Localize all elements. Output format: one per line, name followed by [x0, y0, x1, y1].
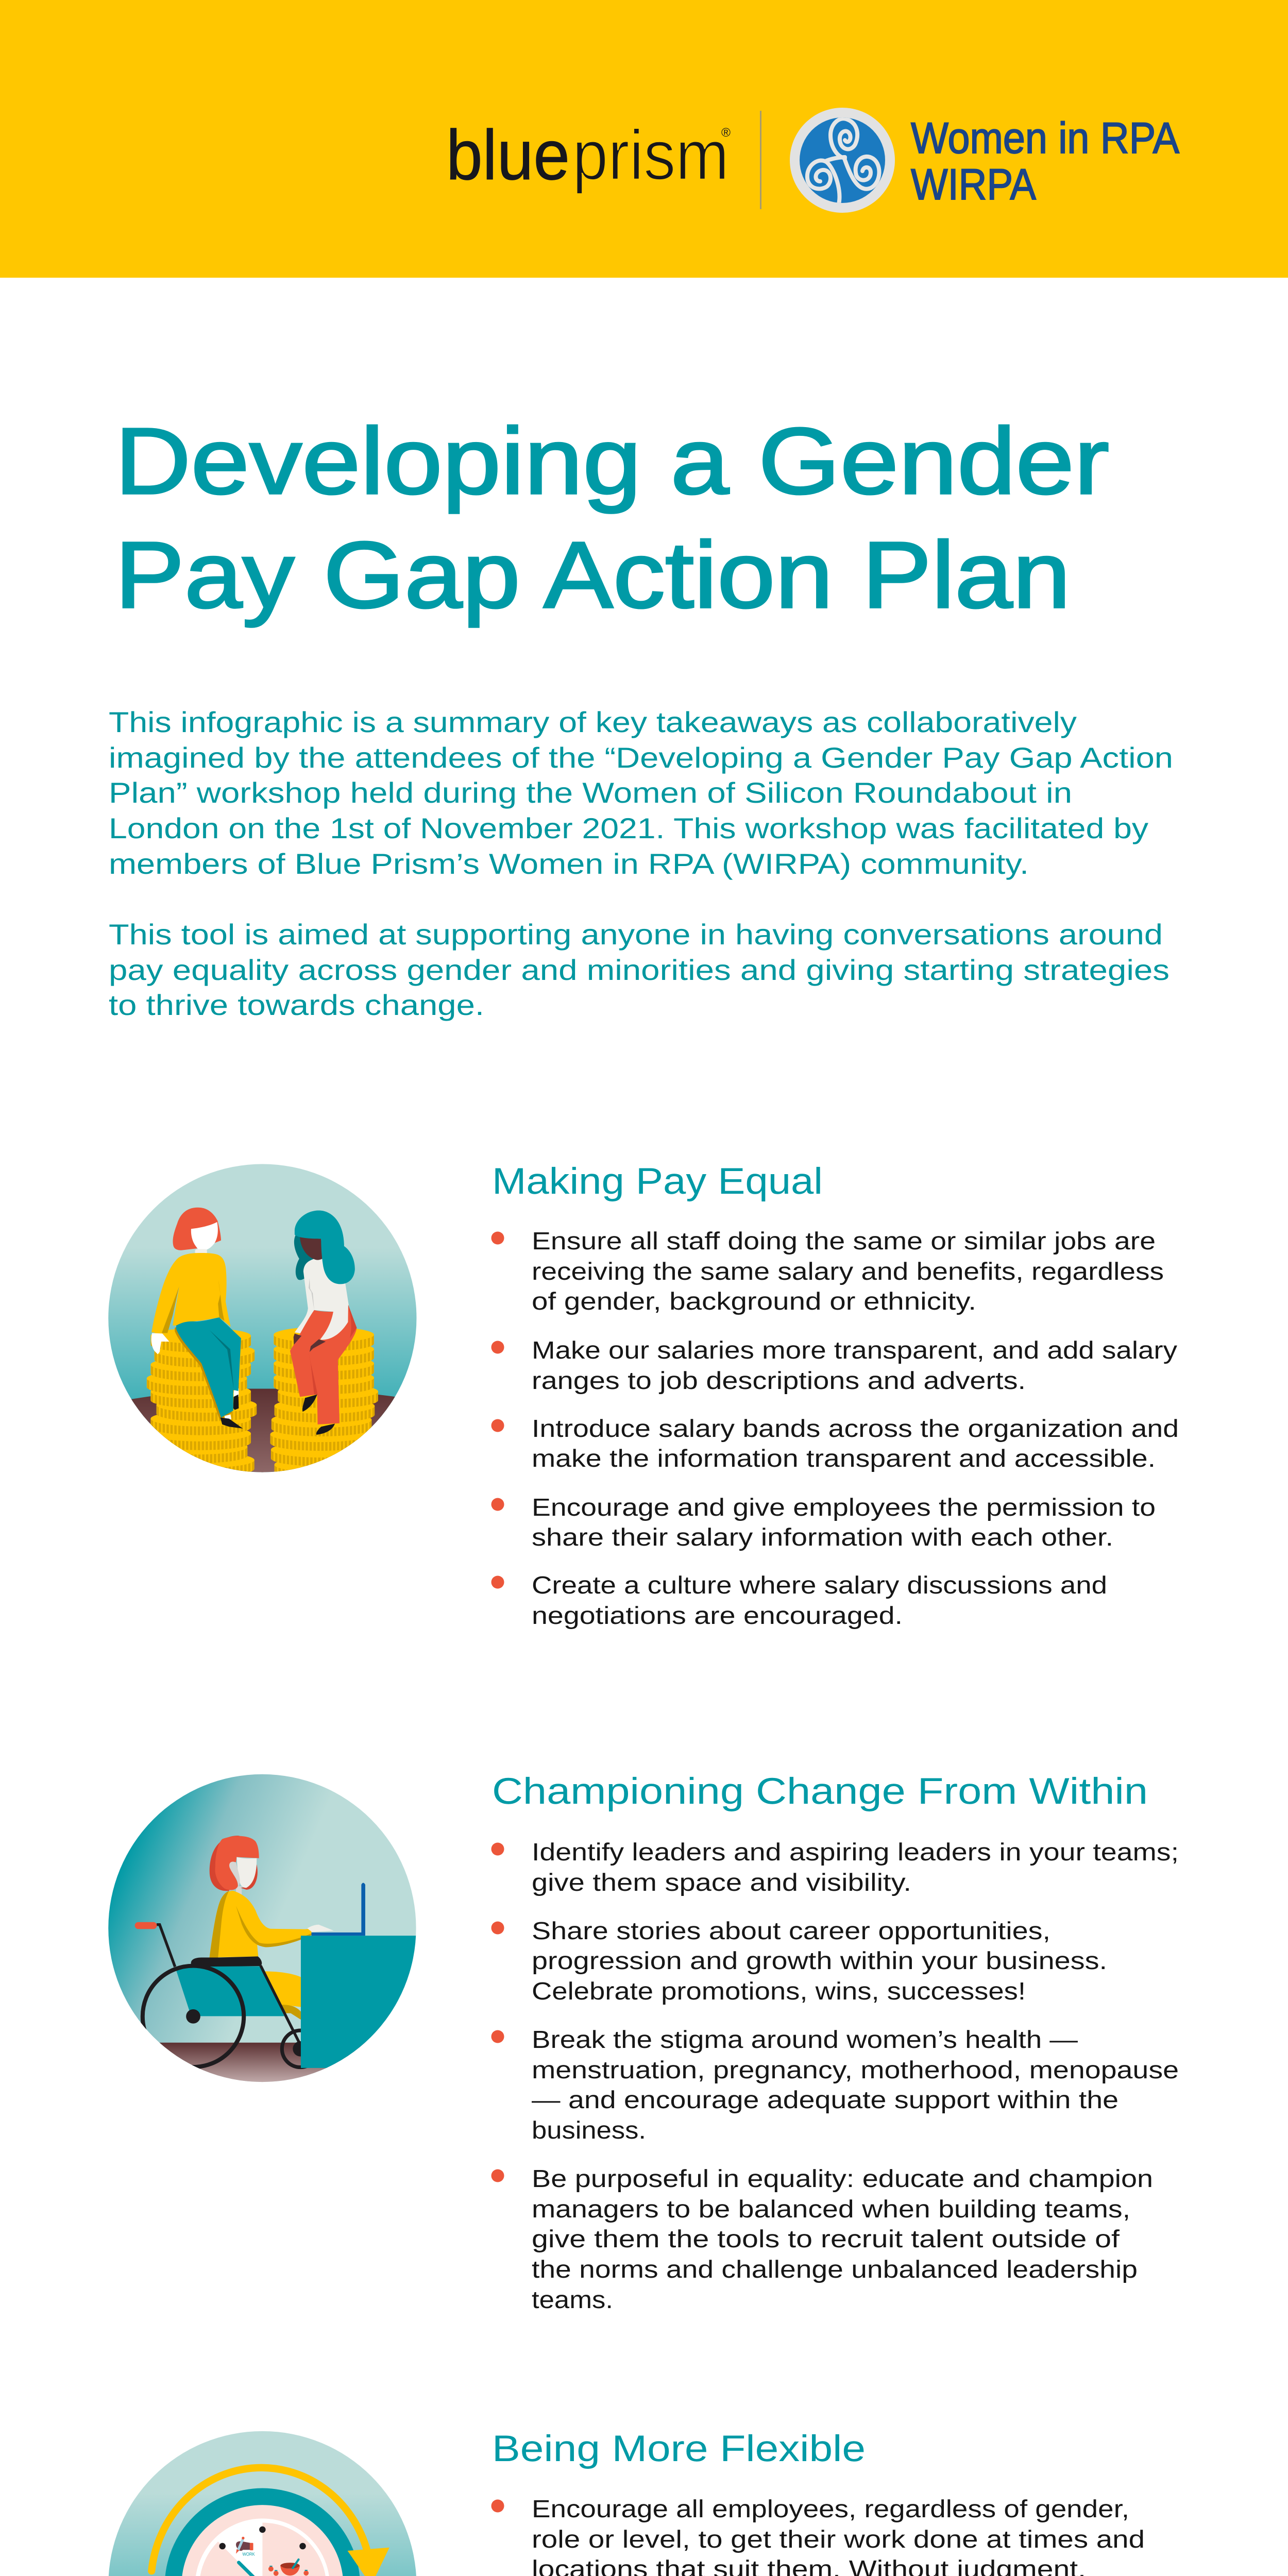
- bullet list: Break the stigma around women’s health —: [532, 2026, 1078, 2054]
- big wheel: [143, 1966, 244, 2067]
- bullet list: teams.: [532, 2286, 613, 2314]
- intro paragraph 1: This infographic is a summary of key takeaways as collaboratively: [109, 706, 1077, 738]
- clock face: [165, 2488, 360, 2576]
- section: Being More Flexible: [492, 2428, 1167, 2576]
- logo text: Women in RPA WIRPA: [911, 114, 1179, 209]
- illustration: woman in wheelchair at a desk with laptop: [100, 1766, 422, 2089]
- right coin stack: [270, 1327, 378, 1481]
- bullet list: — and encourage adequate support within the: [532, 2087, 1118, 2114]
- bullet list: receiving the same salary and benefits, regardless: [532, 1258, 1164, 1285]
- bullet list: progression and growth within your business.: [532, 1947, 1107, 1975]
- intro paragraph 1: Plan” workshop held during the Women of Silicon Roundabout in: [109, 776, 1072, 809]
- logo: blueprism: prism: [572, 116, 729, 195]
- icon: work hand: [236, 2537, 255, 2557]
- heading: Being More Flexible: [492, 2428, 866, 2469]
- arrows: circular cycle: [132, 2468, 389, 2576]
- bullet list: Encourage and give employees the permission to: [532, 1494, 1156, 1521]
- intro paragraph 2: to thrive towards change.: [109, 989, 484, 1021]
- bullet list: give them space and visibility.: [532, 1869, 911, 1896]
- bullet list: [492, 1839, 1179, 2314]
- intro paragraph 1: members of Blue Prism’s Women in RPA (WIRPA) community.: [109, 848, 1029, 880]
- logo: blueprism: blue: [446, 116, 570, 195]
- bullet list: of gender, background or ethnicity.: [532, 1288, 976, 1315]
- bullet list: Be purposeful in equality: educate and champion: [532, 2165, 1153, 2193]
- intro paragraph 1: [109, 706, 1173, 880]
- seated woman: [210, 1836, 334, 1958]
- bullet list: Create a culture where salary discussions and: [532, 1572, 1107, 1599]
- logo: blueprism: ®: [721, 126, 731, 140]
- woman with red hair: [151, 1208, 243, 1429]
- bullet list: [492, 1228, 1179, 1630]
- bullet list: give them the tools to recruit talent outside of: [532, 2226, 1120, 2253]
- section: Making Pay Equal: [492, 1161, 1179, 1630]
- bullet list: Identify leaders and aspiring leaders in your teams;: [532, 1839, 1179, 1866]
- bullet list: role or level, to get their work done at times and: [532, 2526, 1145, 2553]
- bullet list: Ensure all staff doing the same or similar jobs are: [532, 1228, 1156, 1255]
- logo divider: [760, 111, 761, 209]
- illustration: clock with cycle arrows and clouds: [100, 2425, 422, 2576]
- title: [115, 408, 1109, 628]
- bullet list: [492, 2496, 1167, 2576]
- woman with teal hair: [290, 1211, 357, 1435]
- bullet list: business.: [532, 2117, 646, 2144]
- logo: WIRPA triskele badge: [790, 108, 895, 213]
- intro paragraph 2: This tool is aimed at supporting anyone in having conversations around: [109, 918, 1163, 951]
- bullet list: make the information transparent and accessible.: [532, 1445, 1156, 1472]
- bullet list: share their salary information with each other.: [532, 1524, 1113, 1551]
- logo: blueprism: [446, 116, 731, 195]
- icon: bowl and tomatoes: [268, 2560, 309, 2576]
- illustration: two women sitting on coin stacks: [100, 1157, 422, 1481]
- laptop: [311, 1883, 365, 1936]
- intro paragraph 1: London on the 1st of November 2021. This workshop was facilitated by: [109, 812, 1148, 844]
- intro paragraph 2: [109, 918, 1170, 1021]
- title: Developing a Gender: [115, 408, 1109, 514]
- header band: [0, 0, 1288, 278]
- bullet list: Make our salaries more transparent, and add salary: [532, 1337, 1177, 1364]
- logo text: Women in RPA WIRPA: WIRPA: [911, 160, 1036, 209]
- title: Pay Gap Action Plan: [115, 522, 1071, 628]
- icon: work hand: WORK: [243, 2552, 255, 2557]
- bullet list: managers to be balanced when building teams,: [532, 2196, 1130, 2223]
- bullet list: Celebrate promotions, wins, successes!: [532, 1978, 1026, 2005]
- left coin stack: [147, 1328, 257, 1477]
- section: Championing Change From Within: [492, 1771, 1179, 2314]
- bullet list: Share stories about career opportunities,: [532, 1918, 1050, 1945]
- desk: [301, 1936, 422, 2068]
- intro paragraph 2: pay equality across gender and minorities and giving starting strategies: [109, 954, 1170, 986]
- bullet list: Introduce salary bands across the organization and: [532, 1415, 1179, 1443]
- logo text: Women in RPA WIRPA: Women in RPA: [911, 114, 1179, 163]
- bullet list: negotiations are encouraged.: [532, 1602, 903, 1630]
- bullet list: menstruation, pregnancy, motherhood, menopause: [532, 2057, 1179, 2084]
- bullet list: the norms and challenge unbalanced leadership: [532, 2256, 1138, 2283]
- intro paragraph 1: imagined by the attendees of the “Developing a Gender Pay Gap Action: [109, 741, 1173, 774]
- heading: Making Pay Equal: [492, 1161, 823, 1202]
- bullet list: Encourage all employees, regardless of gender,: [532, 2496, 1129, 2523]
- bullet list: ranges to job descriptions and adverts.: [532, 1367, 1026, 1395]
- heading: Championing Change From Within: [492, 1771, 1148, 1812]
